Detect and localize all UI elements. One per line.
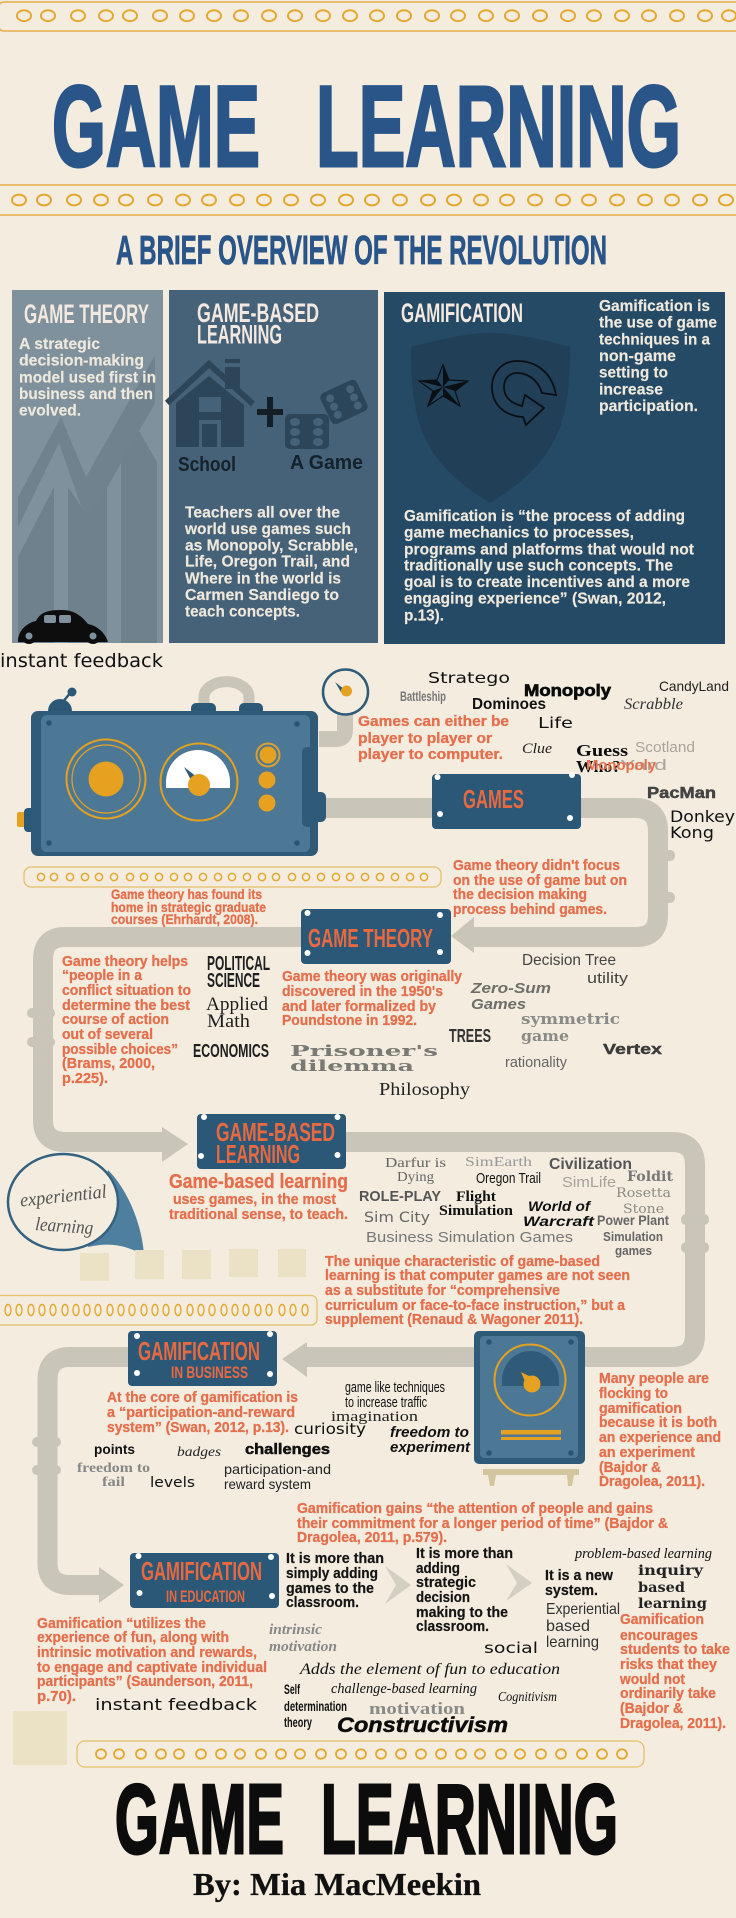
body text: Where in the world is: [185, 570, 341, 587]
plate: gamification in business: [128, 1331, 277, 1386]
word cloud: game-based titles: Civilization: [549, 1156, 632, 1173]
word cloud: gamification in business: fail: [102, 1475, 125, 1490]
text: many people: Dragolea, 2011).: [599, 1473, 705, 1490]
text: many people: [599, 1370, 721, 1490]
title: [52, 63, 681, 191]
plate: games: [432, 772, 581, 829]
word cloud: gamification in business: levels: [150, 1475, 195, 1491]
word cloud: game-based titles: Sim City: [364, 1210, 430, 1226]
text: more than strategic: [416, 1545, 513, 1635]
definition text: increase: [599, 381, 663, 398]
plate: game theory: [301, 909, 451, 964]
panel: gamification: [384, 292, 725, 644]
marquee band under machine: [24, 867, 441, 887]
word cloud: game theory fields: Math: [207, 1011, 251, 1032]
plate: gamification in business: GAMIFICATION: [138, 1336, 260, 1366]
text: encourages students: would not: [619, 1671, 685, 1688]
word cloud: gamification in education bottom: Adds the element of fun to education: [299, 1661, 560, 1678]
quote text: game mechanics to processes,: [404, 525, 634, 542]
word cloud: gamification in business: freedom to: [77, 1461, 150, 1476]
panel: game theory: [12, 290, 163, 644]
top marquee band: [0, 2, 736, 31]
text: many people: gamification: [599, 1400, 682, 1417]
quote text: Gamification is “the process of adding: [404, 508, 685, 525]
word: instant feedback: instant feedback: [0, 650, 163, 672]
word cloud: gamification in education top: learning: [546, 1634, 599, 1651]
text: core of gamification: a “participation-and-reward: [107, 1404, 295, 1421]
text: many people: an experience and: [599, 1429, 721, 1446]
text: many people: Many people are: [599, 1370, 709, 1387]
plate: games: GAMES: [463, 784, 524, 814]
title: GAME: [52, 63, 260, 191]
word cloud: game theory terms: rationality: [505, 1054, 567, 1071]
word cloud: game theory fields: SCIENCE: [207, 970, 260, 992]
decorative square bottom: [13, 1711, 67, 1765]
text: more than adding games: [286, 1550, 384, 1611]
text: more than strategic: It is more than: [416, 1545, 513, 1562]
word cloud: gamification in business: reward system: [224, 1476, 311, 1492]
definition text: the use of game: [599, 315, 717, 332]
word cloud: game-based titles: Warcraft: [523, 1213, 596, 1229]
word cloud: gamification in education top: Experiential: [546, 1601, 620, 1618]
text: game-based learning: Game-based learning: [169, 1171, 348, 1193]
body text: model used first in: [19, 369, 156, 386]
text: unique characteristic: curriculum or face-to-face instruction,” but a: [325, 1297, 626, 1314]
text: many people: (Bajdor &: [599, 1459, 661, 1476]
pipes and arrows: [27, 682, 709, 1603]
text: originally discovered: and later formalized by: [282, 998, 437, 1015]
quote text: engaging experience” (Swan, 2012,: [404, 591, 666, 608]
word cloud: games: Dominoes: [472, 696, 546, 713]
text: encourages students: (Bajdor &: [620, 1700, 683, 1717]
text: more than adding games: games to the: [286, 1580, 374, 1597]
word cloud: game-based titles: Stone: [623, 1202, 664, 1217]
text: core of gamification: At the core of gamification is: [107, 1389, 298, 1406]
word cloud: game-based titles: Business Simulation Games: [366, 1229, 573, 1246]
word cloud: games: Kong: [670, 823, 714, 842]
word cloud: gamification in business: badges: [177, 1445, 222, 1460]
word cloud: game-based titles: Oregon Trail: [476, 1170, 541, 1187]
body text: evolved.: [19, 403, 81, 420]
heading: GAME THEORY: [24, 299, 149, 329]
text: utilizes the experience: p.70).: [37, 1688, 76, 1705]
word cloud: games: Donkey: [670, 807, 735, 826]
text: many people: flocking to: [599, 1385, 668, 1402]
text: more than strategic: making to the: [416, 1604, 508, 1621]
text: games either: player to computer.: [358, 746, 503, 763]
word cloud: games: Who?: [576, 757, 621, 776]
word cloud: gamification in education top: inquiry: [638, 1563, 704, 1579]
text: originally discovered: [282, 968, 463, 1029]
body text: A strategic: [19, 336, 100, 353]
text: game theory helps: (Brams, 2000,: [62, 1055, 155, 1072]
text: graduate courses: [111, 887, 266, 927]
word cloud: games: Monopoly: [524, 681, 612, 700]
word cloud: gamification in education top: based: [546, 1618, 590, 1635]
knobs: [256, 744, 280, 812]
body text: Life, Oregon Trail, and: [185, 554, 350, 571]
text: utilizes the experience: intrinsic motivation and rewards,: [37, 1644, 257, 1661]
word cloud: gamification in education bottom: Constructivism: [337, 1714, 508, 1737]
word cloud: gamification in business: imagination: [331, 1409, 419, 1425]
text: unique characteristic: The unique characteristic of game-based: [325, 1253, 600, 1270]
word cloud: game-based titles: Power Plant: [597, 1212, 669, 1228]
text: more than strategic: strategic: [416, 1574, 476, 1591]
text: unique characteristic: as a substitute for “comprehensive: [325, 1282, 560, 1299]
definition text: Gamification is: [599, 298, 710, 315]
text: encourages students: [619, 1611, 730, 1732]
text: new system: [545, 1567, 613, 1599]
text: game theory helps: out of several: [62, 1026, 153, 1043]
word cloud: gamification in education bottom: social: [484, 1639, 538, 1657]
callout: experiential learning bubble: [8, 1154, 144, 1255]
word cloud: game theory fields: ECONOMICS: [193, 1041, 269, 1061]
icon: plus: [257, 397, 283, 427]
icon labels: School: [178, 454, 236, 476]
body text: teach concepts.: [185, 604, 300, 621]
body text: Teachers all over the: [185, 504, 340, 521]
word cloud: game-based titles: Flight: [456, 1189, 496, 1205]
text: encourages students: risks that they: [620, 1656, 718, 1673]
text: attention of people: their commitment for a longer period of time” (Bajdor &: [297, 1515, 668, 1532]
icon: dice: [285, 378, 369, 449]
plate: gamification in education: [130, 1553, 279, 1608]
text: games either: [358, 713, 509, 763]
device gauge: [474, 1331, 585, 1486]
word cloud: gamification in business: challenges: [245, 1441, 330, 1458]
word cloud: game theory terms: Philosophy: [379, 1079, 470, 1099]
text: encourages students: students to take: [620, 1641, 730, 1658]
text: games either: player to player or: [358, 730, 492, 747]
plate: game theory: GAME THEORY: [308, 923, 433, 953]
word cloud: game-based titles: Simulation: [439, 1203, 514, 1219]
icon: school house: [167, 359, 253, 447]
word cloud: game theory terms: game: [521, 1027, 569, 1045]
body text: as Monopoly, Scrabble,: [185, 538, 358, 555]
word cloud: game theory terms: TREES: [449, 1026, 491, 1046]
text: game theory helps: “people in a: [62, 967, 143, 984]
word cloud: gamification in business: [77, 1379, 471, 1492]
definition text: setting to: [599, 365, 668, 382]
text: game theory focus: Game theory didn't focus: [453, 857, 620, 874]
word cloud: gamification in business: points: [94, 1441, 135, 1457]
text: encourages students: Gamification: [620, 1611, 704, 1628]
text: game theory focus: [453, 857, 627, 918]
word cloud: gamification in education bottom: intrinsic: [269, 1622, 322, 1638]
word cloud: gamification in education top: problem-based learning: [574, 1546, 712, 1562]
heading: LEARNING: [197, 320, 282, 350]
callout: experiential learning bubble: experiential: [19, 1181, 108, 1211]
text: utilizes the experience: experience of fun, along with: [37, 1629, 229, 1646]
text: unique characteristic: [325, 1253, 630, 1328]
text: more than strategic: adding: [416, 1560, 460, 1577]
word cloud: game-based titles: World of: [528, 1198, 591, 1214]
word cloud: game theory terms: Vertex: [603, 1041, 663, 1058]
icon: circular arrow: [492, 361, 556, 425]
text: encourages students: ordinarily take: [620, 1685, 716, 1702]
body text: [184, 504, 358, 621]
word cloud: game-based titles: [359, 1155, 674, 1258]
text: game theory helps: determine the best: [62, 997, 190, 1014]
text: game theory helps: conflict situation to: [62, 982, 191, 999]
text: unique characteristic: learning is that computer games are not seen: [325, 1267, 630, 1284]
text: more than strategic: classroom.: [416, 1618, 489, 1635]
text: encourages students: encourages: [620, 1627, 698, 1644]
text: more than adding games: simply adding: [286, 1565, 378, 1582]
body text: decision-making: [19, 353, 144, 370]
text: many people: an experiment: [599, 1444, 695, 1461]
decorative squares: [80, 1249, 306, 1281]
text: core of gamification: [107, 1389, 298, 1436]
word cloud: game theory terms: Zero-Sum: [470, 980, 551, 997]
word cloud: game-based titles: Darfur is: [385, 1156, 446, 1171]
arrow: chevron one: [385, 1566, 411, 1604]
text: core of gamification: system” (Swan, 2012, p.13).: [107, 1419, 289, 1436]
text: attention of people: [297, 1500, 668, 1546]
body text: Carmen Sandiego to: [185, 587, 339, 604]
word cloud: gamification in education bottom: Cognitivism: [498, 1690, 557, 1705]
word cloud: game theory terms: Decision Tree: [522, 952, 616, 969]
arrow: chevron two: [506, 1564, 532, 1601]
word cloud: gamification in education bottom: determination: [284, 1698, 347, 1714]
word cloud: gamification in education bottom: theory: [284, 1714, 312, 1730]
bottom marquee band: [77, 1741, 644, 1767]
second marquee band: [0, 185, 736, 215]
bottom title: [115, 1764, 618, 1874]
word cloud: games: Guess: [576, 741, 628, 760]
word cloud: games: [400, 669, 735, 842]
word cloud: gamification in education bottom: [95, 1622, 560, 1737]
quote text: [404, 508, 695, 624]
machine: [17, 688, 326, 856]
plate: gamification in education: GAMIFICATION: [141, 1556, 262, 1586]
word cloud: gamification in education top: learning: [638, 1596, 707, 1612]
definition text: [599, 298, 717, 415]
quote text: goal is to create incentives and a more: [404, 574, 690, 591]
word cloud: game theory terms: Prisoner's: [290, 1042, 438, 1060]
text: game-based learning: uses games, in the most: [173, 1191, 336, 1208]
plate: game-based learning: LEARNING: [216, 1139, 300, 1169]
bottom title: GAME: [115, 1764, 284, 1874]
word cloud: game-based titles: Rosetta: [616, 1186, 671, 1201]
text: game theory helps: [62, 953, 191, 1087]
text: game theory helps: Game theory helps: [62, 953, 188, 970]
icon: star: [419, 365, 468, 406]
quote text: traditionally use such concepts. The: [404, 558, 673, 575]
text: encourages students: Dragolea, 2011).: [620, 1715, 726, 1732]
word cloud: game theory terms: symmetric: [521, 1010, 620, 1028]
word cloud: games: Scotland: [635, 739, 695, 756]
definition text: participation.: [599, 398, 698, 415]
text: game theory focus: process behind games.: [453, 901, 607, 918]
definition text: non-game: [599, 348, 676, 365]
body text: world use games such: [184, 521, 351, 538]
word cloud: gamification in education bottom: motivation: [369, 1699, 466, 1718]
text: game theory helps: possible choices”: [62, 1041, 178, 1058]
icon: car: [18, 610, 108, 644]
plate: game-based learning: [197, 1114, 346, 1169]
quote text: p.13).: [404, 607, 444, 624]
text: games either: Games can either be: [358, 713, 509, 730]
plate: game-based learning: GAME-BASED: [216, 1117, 335, 1147]
plate: gamification in education: IN EDUCATION: [166, 1587, 245, 1606]
word cloud: gamification in business: to increase traffic: [345, 1394, 427, 1411]
text: game-based learning: traditional sense, to teach.: [169, 1206, 348, 1223]
text: attention of people: Dragolea, 2011, p.579).: [297, 1529, 447, 1546]
text: utilizes the experience: to engage and captivate individual: [37, 1659, 267, 1676]
heading: [197, 298, 319, 350]
text: utilizes the experience: participants” (Saunderson, 2011,: [37, 1673, 253, 1690]
text: game theory helps: p.225).: [62, 1070, 108, 1087]
text: originally discovered: Poundstone in 1992.: [282, 1012, 417, 1029]
text: utilizes the experience: [37, 1615, 267, 1705]
text: originally discovered: Game theory was originally: [282, 968, 463, 985]
heading: GAME-BASED: [197, 298, 319, 328]
icon labels: [178, 452, 363, 476]
word cloud: games: Monopoly: [586, 757, 657, 774]
text: new system: system.: [545, 1582, 598, 1599]
small gauge: [323, 670, 368, 714]
word cloud: game-based titles: Simulation: [603, 1229, 663, 1244]
word cloud: gamification in education bottom: instant feedback: [95, 1695, 258, 1714]
word cloud: gamification in business: game like techniques: [345, 1379, 445, 1396]
text: attention of people: Gamification gains “the attention of people and gains: [297, 1500, 653, 1517]
byline: By: Mia MacMeekin: [193, 1866, 481, 1902]
text: utilizes the experience: Gamification “utilizes the: [37, 1615, 206, 1632]
word cloud: gamification in education bottom: Self: [284, 1681, 300, 1697]
word cloud: game theory fields: POLITICAL: [207, 953, 270, 975]
word cloud: games: Clue: [522, 741, 552, 757]
callout: experiential learning bubble: learning: [35, 1214, 94, 1239]
word cloud: game theory terms: [290, 952, 663, 1099]
plate: gamification in business: IN BUSINESS: [171, 1363, 248, 1382]
word cloud: gamification in education bottom: motivation: [269, 1639, 337, 1655]
text: unique characteristic: supplement (Renaud & Wagoner 2011).: [325, 1311, 583, 1328]
body text: business and then: [19, 386, 153, 403]
word cloud: game theory fields: [193, 953, 270, 1061]
word cloud: games: Yard: [620, 757, 667, 774]
word cloud: games: Life: [538, 714, 573, 732]
word cloud: game-based titles: Foldit: [627, 1169, 674, 1185]
word cloud: game-based titles: Dying: [397, 1170, 434, 1185]
text: many people: because it is both: [599, 1414, 717, 1431]
text: originally discovered: discovered in the 1950's: [282, 983, 443, 1000]
marquee band middle: [0, 1296, 317, 1325]
text: graduate courses: courses (Ehrhardt, 2008).: [111, 912, 258, 927]
text: new system: It is a new: [545, 1567, 613, 1584]
text: more than adding games: classroom.: [286, 1594, 359, 1611]
text: more than adding games: It is more than: [286, 1550, 384, 1567]
quote text: programs and platforms that would not: [404, 541, 695, 558]
text: graduate courses: home in strategic graduate: [111, 900, 266, 915]
left dial: [66, 740, 146, 818]
word cloud: games: Stratego: [428, 669, 510, 687]
word cloud: gamification in education top: [546, 1546, 712, 1651]
word cloud: gamification in education bottom: challenge-based learning: [331, 1681, 477, 1697]
heading: GAMIFICATION: [401, 298, 523, 328]
body text: [19, 336, 156, 420]
word cloud: game theory terms: dilemma: [290, 1057, 414, 1075]
word cloud: games: CandyLand: [659, 678, 729, 694]
word cloud: gamification in business: curiosity: [294, 1420, 366, 1438]
word cloud: game-based titles: SimLife: [562, 1174, 616, 1191]
word cloud: gamification in business: participation-and: [224, 1461, 331, 1477]
word cloud: game-based titles: SimEarth: [465, 1155, 532, 1170]
word cloud: game theory terms: Games: [471, 996, 526, 1013]
text: game theory helps: course of action: [62, 1011, 169, 1028]
word cloud: gamification in business: experiment: [390, 1439, 471, 1456]
word cloud: games: Battleship: [400, 688, 446, 704]
text: game theory focus: on the use of game but on: [453, 872, 627, 889]
right dial: [160, 744, 238, 820]
word cloud: games: Scrabble: [624, 696, 683, 713]
word cloud: game-based titles: ROLE-PLAY: [359, 1188, 441, 1205]
word cloud: game theory fields: Applied: [206, 994, 268, 1015]
text: game-based learning: [169, 1171, 348, 1223]
word cloud: gamification in education top: based: [638, 1580, 685, 1596]
text: game theory focus: the decision making: [453, 886, 587, 903]
word cloud: games: PacMan: [647, 785, 716, 802]
panel: game-based learning: [167, 290, 378, 643]
word cloud: game-based titles: games: [615, 1243, 652, 1258]
word cloud: game theory terms: utility: [587, 970, 629, 987]
icon labels: A Game: [290, 452, 363, 474]
definition text: techniques in a: [599, 331, 710, 348]
text: graduate courses: Game theory has found its: [111, 887, 262, 902]
word cloud: gamification in business: freedom to: [390, 1424, 469, 1441]
text: more than strategic: decision: [416, 1589, 470, 1606]
icon: shield: [411, 333, 570, 503]
